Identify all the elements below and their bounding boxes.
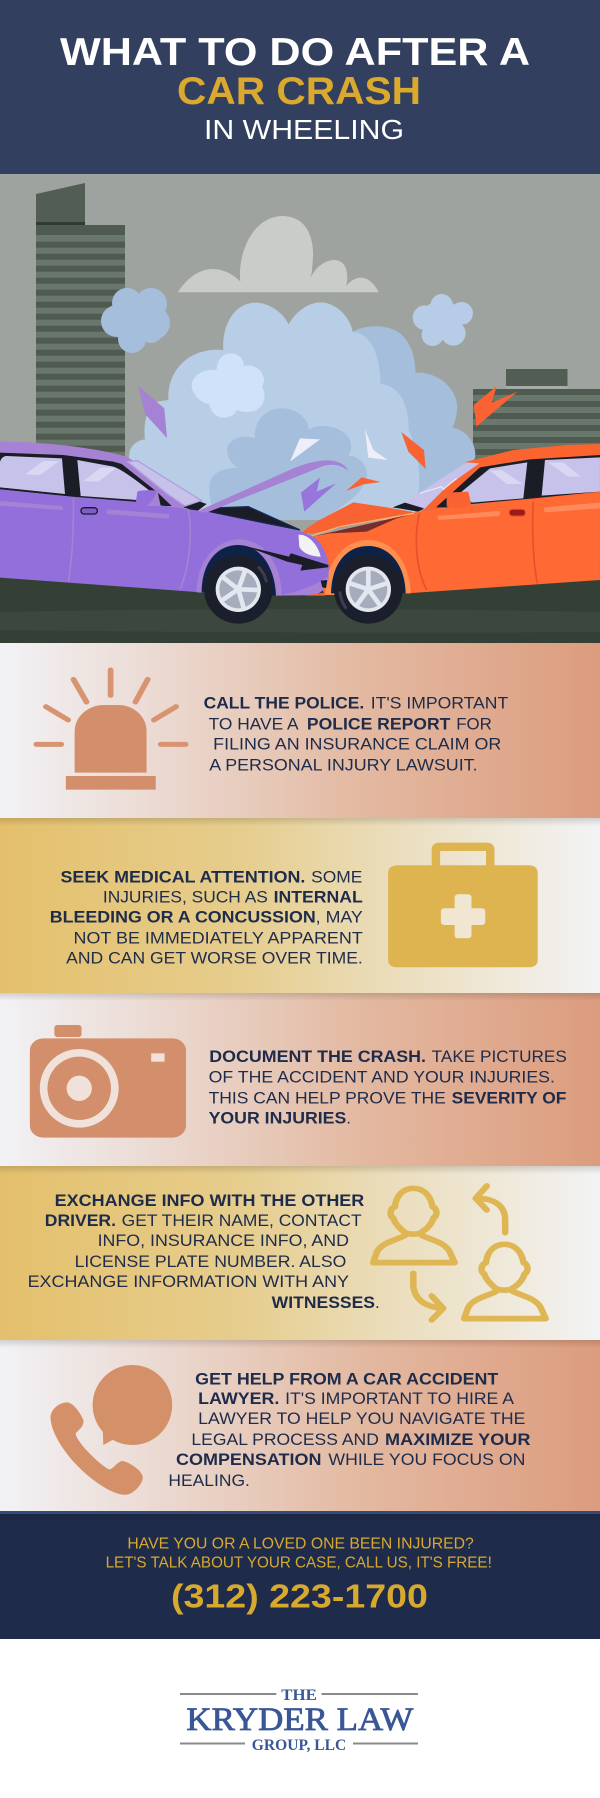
small smoke puff right (413, 294, 473, 346)
purple car wheel (204, 555, 273, 624)
text: exchange info: INFO, INSURANCE INFO, AND (98, 1231, 349, 1250)
text: document the crash: SEVERITY OF (452, 1088, 566, 1107)
panel: seek medical attention (0, 818, 600, 993)
logo: the kryder law group: THE (281, 1687, 317, 1704)
icon: siren (36, 670, 186, 790)
text: get help from a lawyer: COMPENSATION (176, 1450, 322, 1469)
text: seek medical attention: , MAY (316, 907, 363, 926)
text: document the crash (209, 1047, 567, 1127)
text: get help from a lawyer: MAXIMIZE YOUR (385, 1430, 530, 1449)
title line: what to do after a: WHAT TO DO AFTER A (60, 31, 530, 74)
phone number: (312) 223-1700 (171, 1577, 428, 1614)
text: get help from a lawyer: HEALING. (168, 1471, 250, 1490)
text: seek medical attention: AND CAN GET WORSE OVER TIME. (66, 948, 363, 967)
logo: the kryder law group: GROUP, LLC (252, 1737, 346, 1754)
text: document the crash: TAKE PICTURES (432, 1047, 567, 1066)
text: exchange info: WITNESSES (272, 1293, 375, 1312)
orange debris top right (474, 386, 517, 427)
orange car wheel (334, 555, 403, 624)
subtitle: in wheeling: IN WHEELING (204, 114, 404, 145)
flying debris (138, 386, 426, 512)
orange car (300, 444, 600, 624)
right building (473, 369, 600, 469)
text: document the crash: . (346, 1108, 351, 1127)
header panel (0, 0, 600, 174)
cta text line 2: LET'S TALK ABOUT YOUR CASE, CALL US, IT'S FREE! (106, 1554, 492, 1571)
purple car (0, 442, 329, 624)
text: get help from a lawyer: LEGAL PROCESS AND (191, 1430, 379, 1449)
purple car front details (245, 535, 328, 596)
text: get help from a lawyer: LAWYER. (198, 1389, 279, 1408)
text: seek medical attention: SEEK MEDICAL ATTENTION. (60, 867, 305, 886)
road (0, 560, 600, 643)
call to action panel (0, 1511, 600, 1639)
text: get help from a lawyer: GET HELP FROM A CAR ACCIDENT (195, 1369, 499, 1388)
raised purple hood (197, 460, 348, 513)
icon: first aid kit (388, 843, 538, 967)
icon: camera (30, 1025, 186, 1138)
text: seek medical attention (50, 867, 363, 967)
text: get help from a lawyer: WHILE YOU FOCUS ON (328, 1450, 525, 1469)
text: exchange info: EXCHANGE INFORMATION WITH ANY (28, 1272, 349, 1291)
icon: two people exchanging (373, 1186, 546, 1320)
text: seek medical attention: INTERNAL (274, 887, 363, 906)
logo: the kryder law group (180, 1687, 418, 1754)
text: call the police: A PERSONAL INJURY LAWSUIT. (209, 755, 478, 774)
text: document the crash: DOCUMENT THE CRASH. (209, 1047, 426, 1066)
text: exchange info: GET THEIR NAME, CONTACT (122, 1211, 362, 1230)
text: call the police (204, 693, 508, 774)
cta text line 1: HAVE YOU OR A LOVED ONE BEEN INJURED? (127, 1535, 474, 1552)
text: document the crash: OF THE ACCIDENT AND YOUR INJURIES. (209, 1067, 555, 1086)
title line: car crash: CAR CRASH (177, 70, 421, 113)
panel: document the crash (0, 993, 600, 1166)
text: document the crash: THIS CAN HELP PROVE THE (209, 1088, 446, 1107)
text: call the police: POLICE REPORT (307, 714, 451, 733)
text: seek medical attention: INJURIES, SUCH AS (103, 887, 268, 906)
small smoke puff left (101, 288, 170, 353)
text: call the police: FOR (456, 714, 492, 733)
text: exchange info: LICENSE PLATE NUMBER. ALSO (75, 1252, 346, 1271)
text: exchange info (28, 1191, 380, 1312)
text: exchange info: DRIVER. (45, 1211, 116, 1230)
text: document the crash: YOUR INJURIES (209, 1108, 346, 1127)
left skyscraper (36, 183, 125, 460)
text: exchange info: . (375, 1293, 380, 1312)
text: seek medical attention: NOT BE IMMEDIATELY APPARENT (74, 928, 363, 947)
logo: the kryder law group: KRYDER LAW (186, 1702, 414, 1738)
crash illustration (0, 174, 600, 643)
text: get help from a lawyer: IT'S IMPORTANT TO HIRE A (285, 1389, 515, 1408)
text: seek medical attention: BLEEDING OR A CONCUSSION (50, 907, 316, 926)
text: seek medical attention: SOME (311, 867, 362, 886)
text: call the police: TO HAVE A (209, 714, 299, 733)
panel: exchange info (0, 1166, 600, 1340)
text: call the police: FILING AN INSURANCE CLAIM OR (213, 734, 501, 753)
text: get help from a lawyer (168, 1369, 530, 1490)
panel: get help from a lawyer (0, 1340, 600, 1512)
panel: call the police (0, 643, 600, 818)
text: call the police: IT'S IMPORTANT (371, 693, 508, 712)
text: call the police: CALL THE POLICE. (204, 693, 364, 712)
grey cloud (178, 216, 379, 292)
text: exchange info: EXCHANGE INFO WITH THE OTHER (55, 1191, 364, 1210)
text: get help from a lawyer: LAWYER TO HELP YOU NAVIGATE THE (198, 1409, 525, 1428)
main smoke cloud (120, 302, 475, 520)
icon: phone and speech bubble (50, 1365, 172, 1495)
